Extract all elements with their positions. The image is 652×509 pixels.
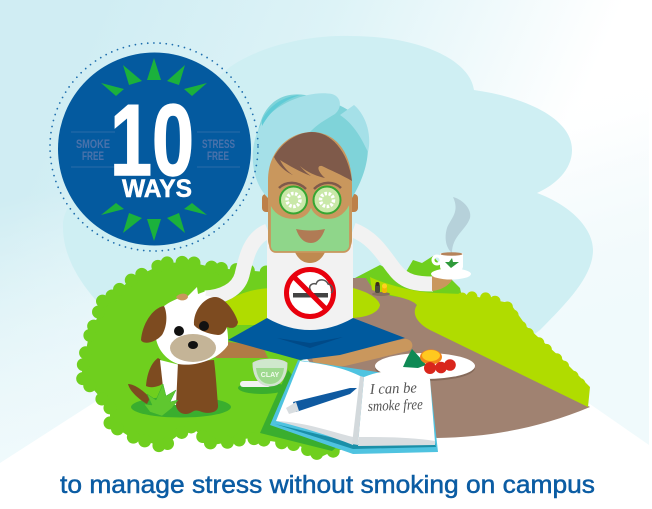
left green lawn <box>81 262 340 456</box>
subtitle: to manage stress without smoking on campus <box>60 471 595 499</box>
dotted ring <box>50 43 258 251</box>
right arm <box>353 230 433 284</box>
hand <box>432 276 453 291</box>
dog <box>128 287 238 418</box>
muzzle <box>170 334 216 362</box>
smoke free label: SMOKE <box>76 139 110 151</box>
nose <box>188 341 198 349</box>
tail <box>128 384 150 404</box>
cucumber left <box>280 186 307 214</box>
green rays <box>101 58 207 241</box>
torso <box>267 235 353 330</box>
saucer <box>431 268 471 280</box>
body <box>176 360 218 414</box>
winding brown path <box>300 278 590 438</box>
head <box>155 295 228 365</box>
badge <box>50 43 258 251</box>
tomatoes <box>424 359 456 374</box>
grass tuft <box>144 384 178 416</box>
white ground left <box>0 373 300 509</box>
blue disc <box>58 52 251 246</box>
steam <box>446 197 470 253</box>
open notebook <box>260 360 438 454</box>
leafy greens <box>403 349 426 368</box>
face <box>268 132 352 252</box>
leaf on cup <box>445 258 459 268</box>
background hill left of right arm <box>355 265 403 300</box>
cover <box>270 360 438 454</box>
head tuft <box>188 287 206 298</box>
number ten: 10 <box>110 85 194 197</box>
clay jar <box>238 359 287 394</box>
pen <box>286 388 357 414</box>
right page <box>358 371 435 444</box>
handwriting line two: smoke free <box>368 397 423 415</box>
tan spot <box>176 294 188 300</box>
tiny people on path <box>372 282 390 296</box>
tea cup with steam <box>431 197 471 291</box>
orange slice <box>420 350 442 364</box>
turban <box>253 93 369 198</box>
cover shadow <box>260 370 345 451</box>
hair <box>274 132 352 181</box>
gutter <box>352 376 364 445</box>
figure head <box>253 93 369 263</box>
ways: WAYS <box>122 175 192 203</box>
handwriting line one: I can be <box>369 380 417 398</box>
left page <box>276 361 362 445</box>
right brown patch <box>194 297 238 335</box>
lime hill right of path <box>370 277 590 407</box>
white chest <box>160 360 180 405</box>
smoke free label: FREE <box>82 151 104 163</box>
stress free label: STRESS <box>202 139 235 151</box>
back <box>146 358 166 387</box>
stress free label: FREE <box>207 151 229 163</box>
neck chin <box>294 250 326 263</box>
cup <box>440 253 463 273</box>
left ear <box>141 306 166 343</box>
white ground right <box>300 300 649 509</box>
left arm <box>205 231 268 298</box>
cucumber right <box>314 186 340 214</box>
clay label: CLAY <box>261 372 280 379</box>
lime hill on left behind body <box>222 288 270 325</box>
lime hill beside path <box>353 288 380 318</box>
clay face mask <box>270 201 350 252</box>
ground shadow <box>131 396 231 418</box>
divider lines <box>71 132 240 167</box>
seated legs <box>215 318 412 368</box>
mouth <box>296 229 325 243</box>
cup handle <box>433 256 441 264</box>
pale cloud behind figure <box>63 36 593 360</box>
no smoking sign <box>286 270 334 316</box>
background hill behind tea cup <box>403 256 464 306</box>
ears <box>262 194 358 212</box>
plate of food <box>375 349 475 381</box>
eyebrows <box>279 183 341 189</box>
eyes <box>174 321 209 336</box>
